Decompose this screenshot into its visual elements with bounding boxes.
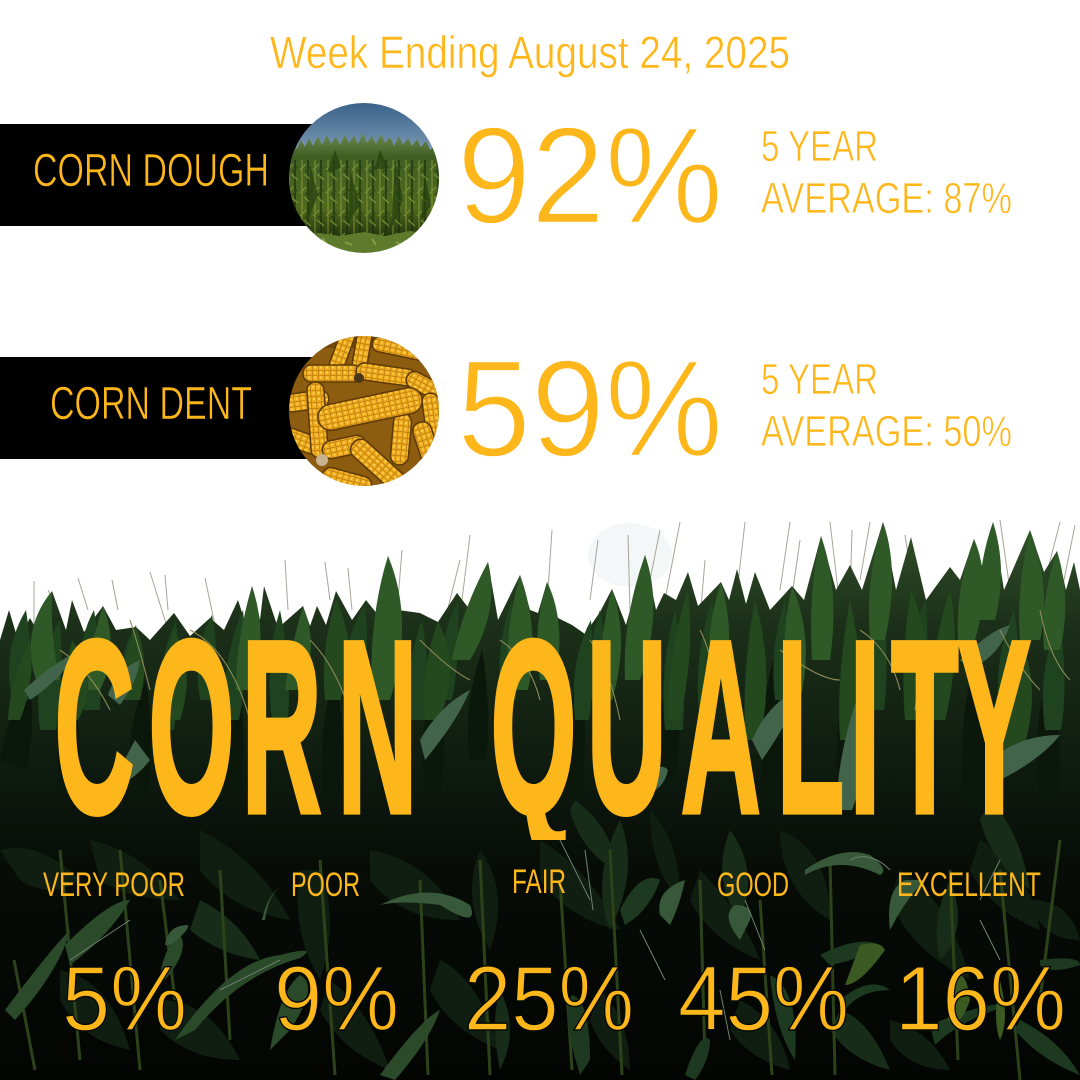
five year average: 50 percent: 5 YEAR [761, 355, 878, 404]
rating: good: GOOD [717, 866, 789, 904]
rating: fair: FAIR [512, 863, 566, 901]
pale green leaves mid band [24, 625, 1060, 810]
stems [14, 840, 1060, 1080]
five year average: 87 percent [761, 122, 1012, 223]
title: week ending: Week Ending August 24, 2025 [270, 27, 790, 78]
label bar: corn dent [0, 357, 320, 459]
rating: poor: POOR [291, 866, 360, 904]
rating: very poor: VERY POOR [43, 866, 185, 904]
five year average: 50 percent: AVERAGE: 50% [761, 407, 1012, 456]
panel: corn dent [0, 336, 1011, 486]
photo: corn field panorama [0, 520, 1080, 1080]
photo: corn field circle [289, 103, 439, 254]
yellow tassel strands [60, 610, 1070, 730]
mid green blades upper band [9, 600, 1065, 730]
rating: good [678, 866, 849, 1050]
panel: corn dough [0, 99, 1012, 254]
label bar: corn dent: CORN DENT [50, 377, 252, 429]
rating: very poor [43, 866, 187, 1050]
rating: fair [464, 863, 634, 1050]
dark leaves upper band [0, 650, 1060, 810]
rating: excellent [895, 866, 1066, 1050]
photo: corn cobs circle [289, 336, 439, 486]
pale cloud tint [588, 523, 672, 587]
rating: very poor: 5% [62, 948, 187, 1050]
rating: good: 45% [678, 948, 849, 1050]
label bar: corn dough: CORN DOUGH [33, 144, 269, 196]
five year average: 87 percent: 5 YEAR [761, 122, 878, 171]
mid green blades [8, 590, 1032, 760]
highlighted lower leaves [5, 840, 1080, 1080]
tassel hairs [34, 520, 1075, 630]
bright blades upper band [31, 522, 1065, 700]
five year average: 50 percent [761, 355, 1012, 456]
rating: fair: 25% [464, 948, 634, 1050]
rating: excellent: 16% [895, 948, 1066, 1050]
value: 92 percent: 92% [457, 99, 723, 253]
dim leaves lower band [0, 810, 1080, 1070]
rating: poor: 9% [274, 948, 399, 1050]
value: 59 percent: 59% [457, 332, 723, 486]
five year average: 87 percent: AVERAGE: 87% [761, 174, 1012, 223]
label bar: corn dough [0, 124, 320, 226]
plant mass silhouette [0, 522, 1080, 1080]
midrib highlights [70, 840, 1000, 1040]
heading: corn quality: CORN QUALITY [54, 590, 1031, 865]
rating: poor [274, 866, 399, 1050]
